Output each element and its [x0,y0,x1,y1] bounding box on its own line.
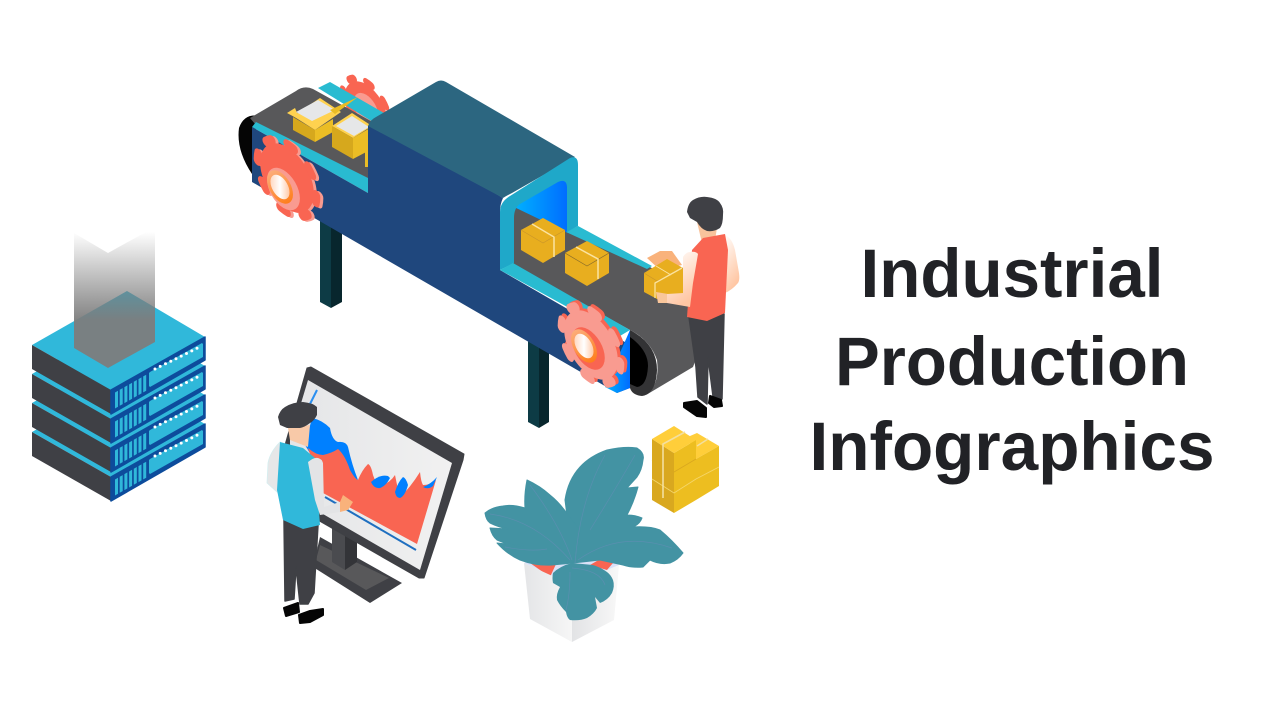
back rail right [566,226,652,269]
leaf veins [490,455,672,610]
chart axes [307,390,416,550]
fading gray column [74,227,155,368]
worker at conveyor [644,197,739,417]
red vest [687,234,728,321]
neck [697,222,717,243]
bottom leaf [552,563,614,620]
box two [565,241,609,286]
front sleeve [308,458,340,515]
monitor screen [290,380,452,570]
monitor frame [285,367,464,578]
conveyor belt upper [250,87,378,182]
left gear [258,127,319,230]
belt lower [510,203,703,395]
shoes [684,396,722,417]
conveyor legs [320,215,549,428]
front arm [667,252,698,307]
back sleeve [267,442,283,493]
pot [524,538,619,642]
box one [521,218,565,263]
title line 1: Industrial [860,235,1164,312]
server unit 3 [32,349,205,472]
back gear [343,68,389,150]
lower rail right [500,263,630,336]
shoes [284,603,323,623]
right roller [630,330,657,396]
chart blue area [305,418,358,480]
server unit 2 [32,320,205,443]
hair [278,402,317,428]
neck [288,425,310,447]
tunnel frame [500,157,578,270]
pants [689,314,724,404]
machine body [252,121,630,393]
hair [687,197,723,231]
back rail left [318,82,384,122]
title line 3: Infographics [810,408,1214,485]
server stack [32,227,205,501]
back arm [723,235,739,293]
chart blue blobs [371,476,437,498]
top right leaf [565,447,683,567]
title [810,235,1214,485]
machine hood top [368,80,575,198]
back leaves [485,447,683,567]
tunnel opening [512,178,568,233]
server unit 1 [32,291,205,414]
lower hand [656,292,668,303]
left leaf [485,480,580,565]
open yellow boxes [287,97,372,167]
title line 2: Production [835,323,1189,400]
conveyor machine [239,68,703,428]
right gear [562,292,623,396]
blue end cap [605,330,630,393]
potted plant [485,447,683,642]
upper hand [647,251,682,270]
front rail left [252,122,368,193]
worker at monitor [267,402,353,623]
stacked yellow boxes [652,426,719,513]
left roller [239,115,264,174]
hand [340,495,353,512]
pants [284,520,318,604]
monitor stand [313,520,402,603]
chart red area [308,448,436,544]
server unit 4 [32,378,205,501]
teal vest [277,442,320,529]
held box [644,259,683,299]
monitor with chart [285,367,464,603]
